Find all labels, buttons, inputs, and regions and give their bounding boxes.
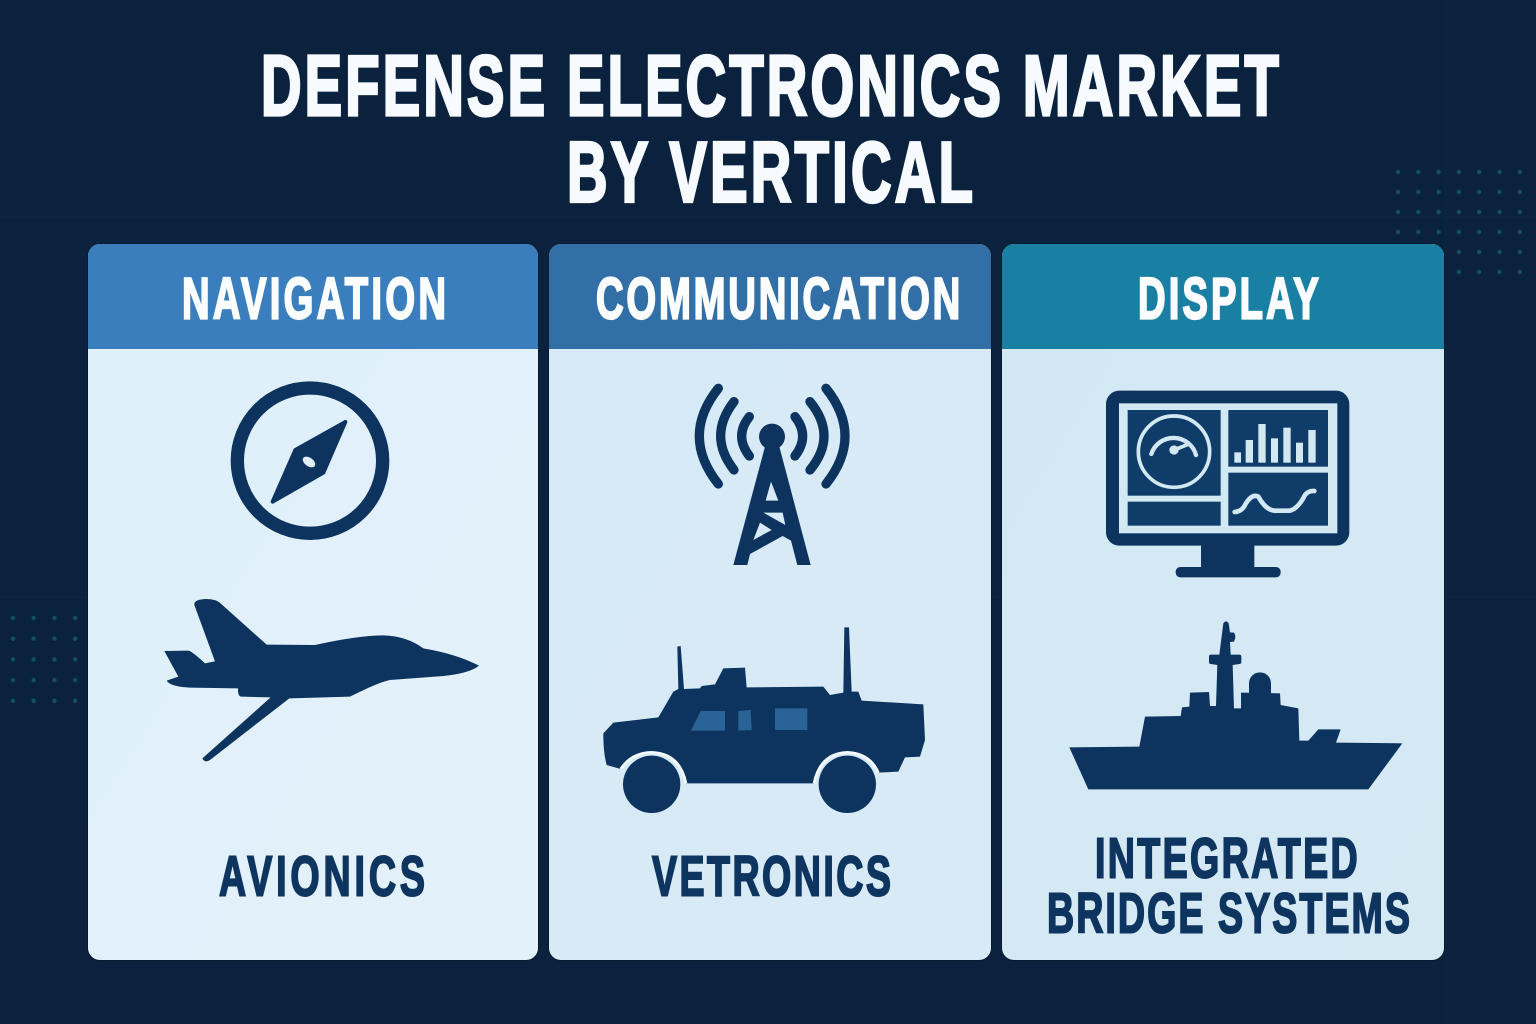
header: display: DISPLAY — [1138, 268, 1319, 331]
label: integrated bridge systems: INTEGRATED — [1095, 827, 1358, 890]
label: integrated bridge systems: BRIDGE SYSTEMS — [1047, 882, 1410, 945]
icon: compass — [237, 388, 383, 533]
label: vetronics: VETRONICS — [652, 845, 891, 908]
header: display — [1002, 244, 1444, 349]
header: navigation — [88, 244, 538, 349]
header: communication: COMMUNICATION — [596, 268, 960, 331]
icon: monitor dashboard — [1106, 391, 1349, 577]
panel: navigation — [87, 243, 539, 961]
icon: fighter jet — [164, 599, 479, 761]
title — [261, 39, 1279, 220]
header: navigation: NAVIGATION — [182, 268, 446, 331]
header: communication — [549, 244, 991, 349]
title: BY VERTICAL — [567, 126, 973, 220]
icon: radio tower — [699, 388, 845, 565]
label: avionics: AVIONICS — [219, 845, 425, 908]
panel: display — [1001, 243, 1445, 961]
panel: communication — [548, 243, 992, 961]
icon: naval ship — [1069, 621, 1402, 789]
icon: armored vehicle — [603, 627, 925, 813]
label: integrated bridge systems — [1047, 827, 1410, 945]
title: DEFENSE ELECTRONICS MARKET — [261, 39, 1279, 134]
